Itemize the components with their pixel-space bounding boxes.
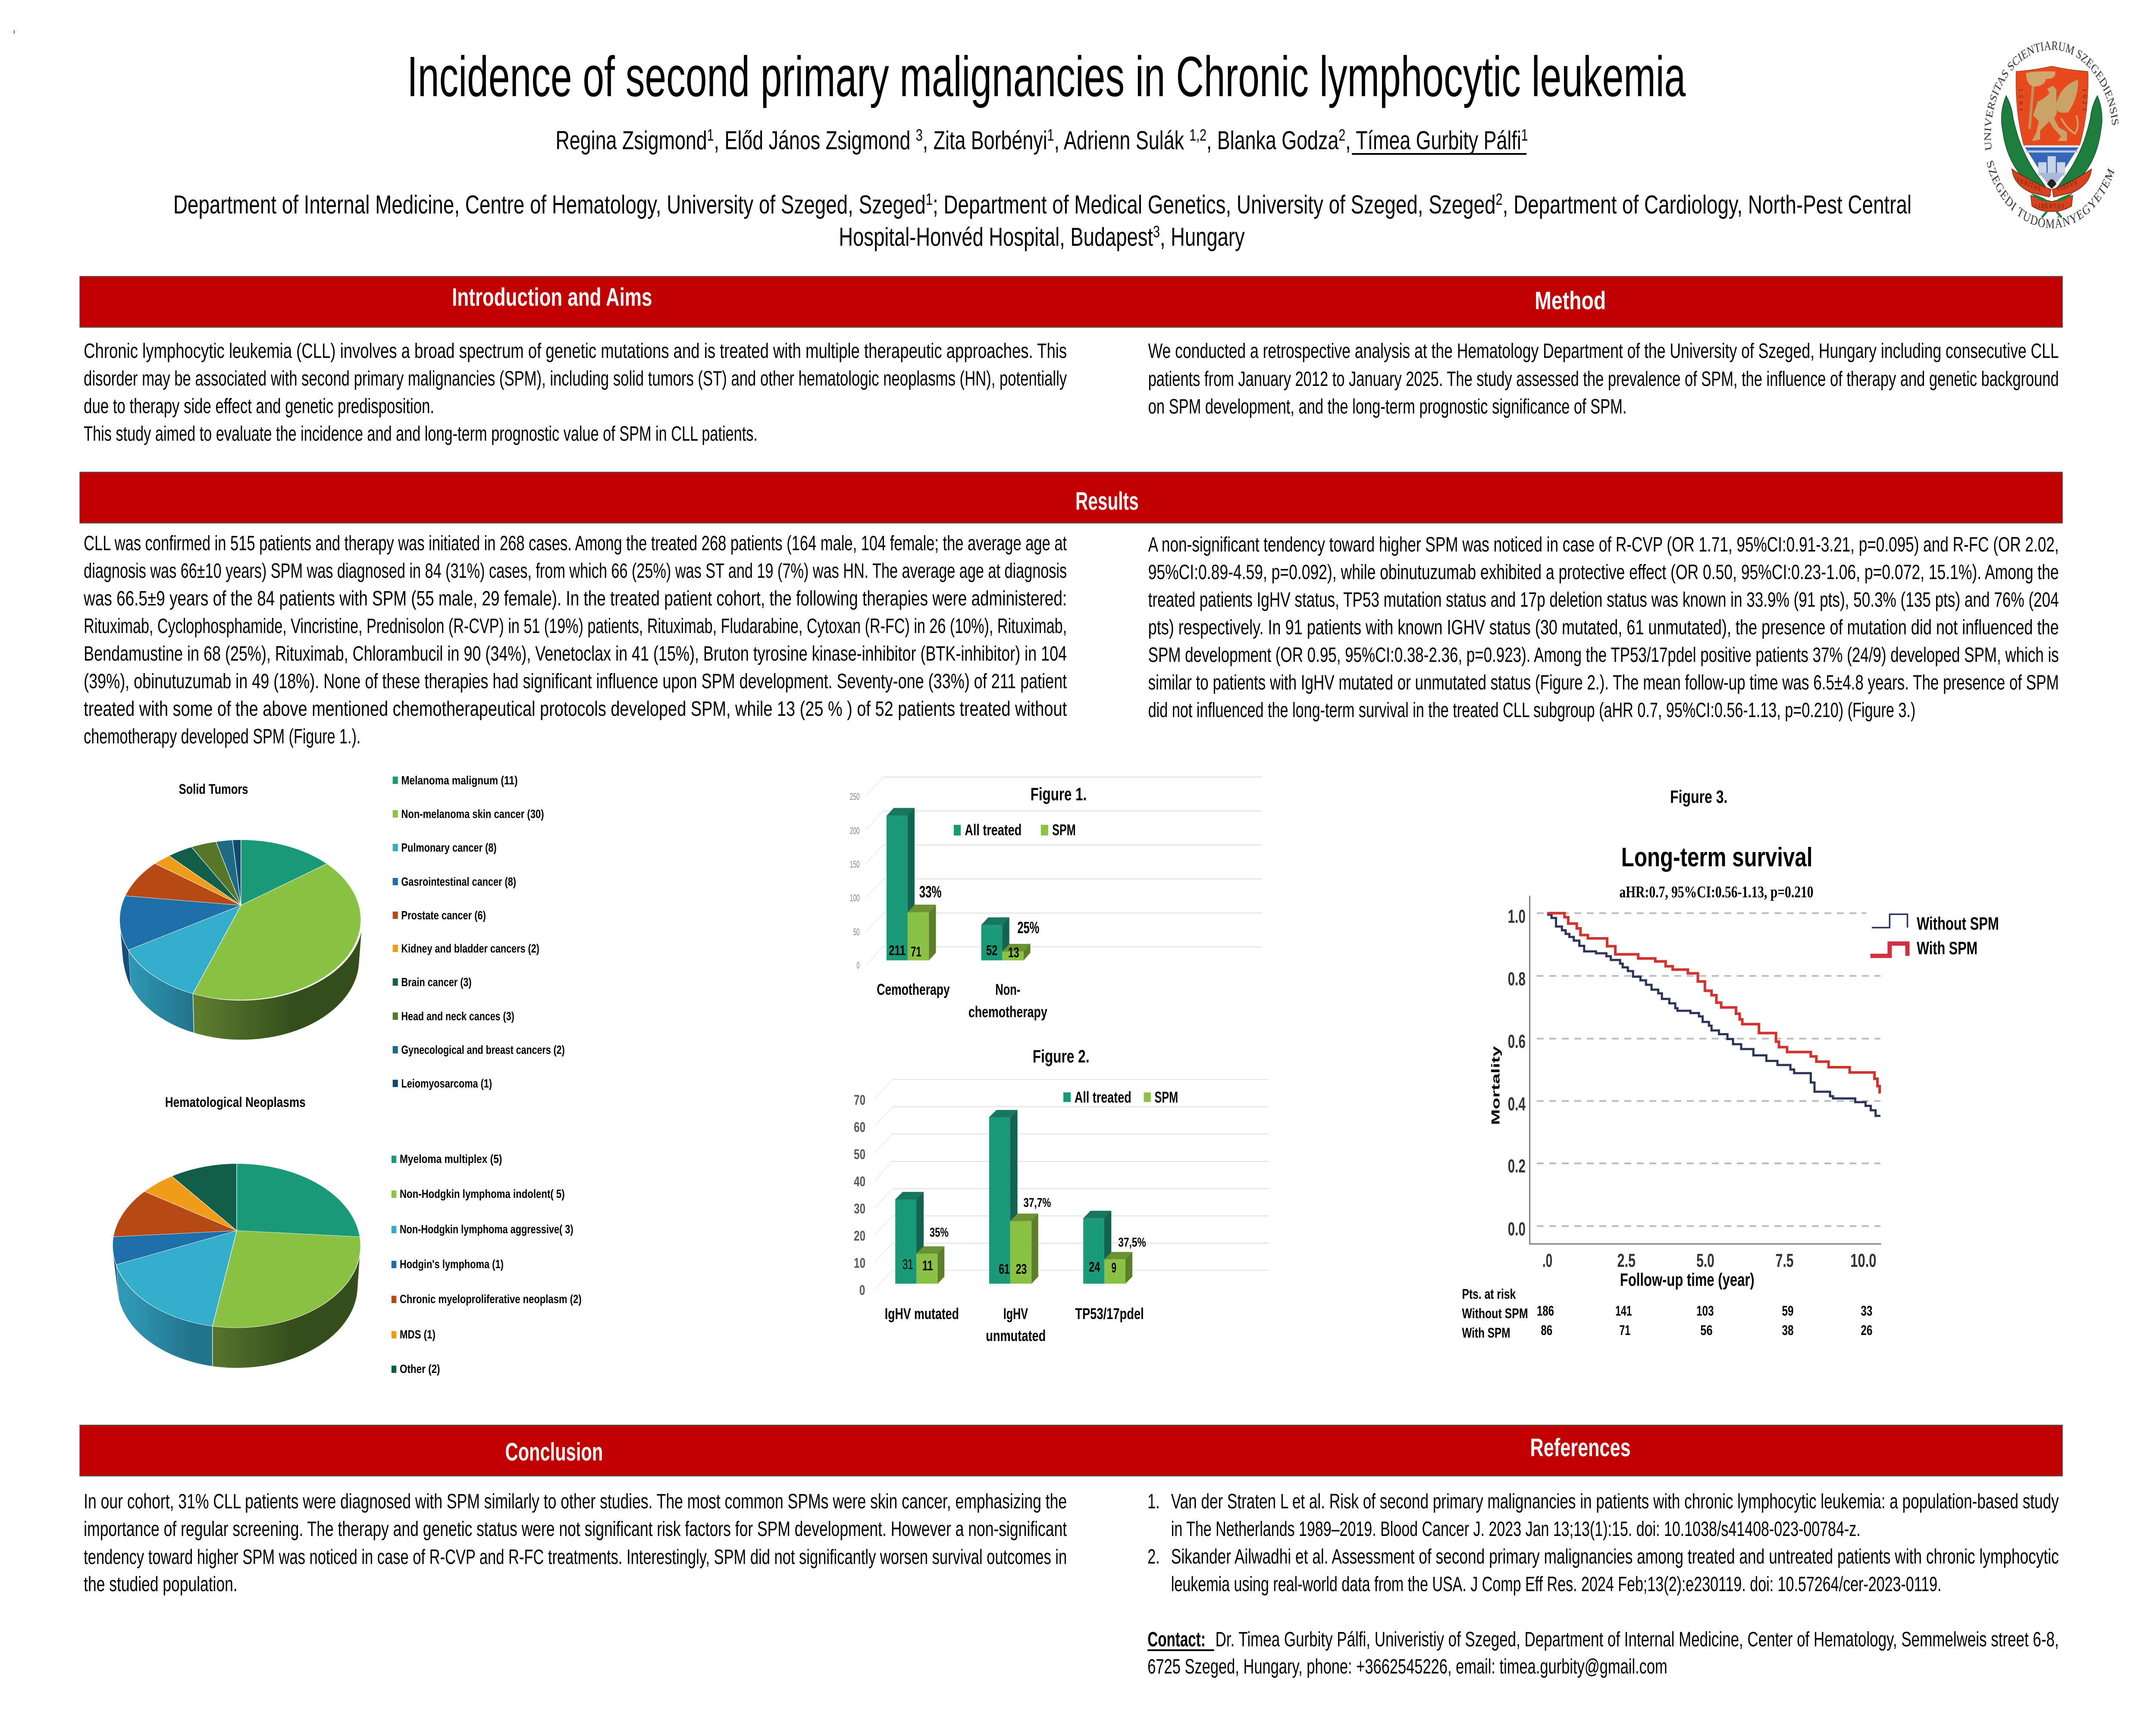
patients at risk table: 26 xyxy=(1861,1322,1872,1338)
figure 1 legend and labels: SPM xyxy=(1052,821,1076,839)
panel: Conclusion and References header bar: References xyxy=(1530,1434,1631,1462)
figure 2 legend and labels: SPM xyxy=(1155,1089,1178,1106)
3D pie slices: hematological neoplasms xyxy=(113,1163,360,1368)
figure 2 axis ticks: 50 xyxy=(854,1147,865,1162)
panel: Conclusion and References header bar: Conclusion xyxy=(505,1438,603,1466)
authors: , Előd János Zsigmond xyxy=(714,126,916,155)
chart title: Solid Tumors: Solid Tumors xyxy=(179,781,248,797)
patients at risk table: 33 xyxy=(1861,1303,1872,1319)
survival chart: Figure 3 xyxy=(1462,787,1999,1341)
figure 1 legend and labels: chemotherapy xyxy=(968,1003,1047,1021)
figure 1 axis ticks: 150 xyxy=(850,860,860,870)
patients at risk table: With SPM xyxy=(1462,1325,1510,1341)
text block: results right: SPM development (OR 0.95, 95%CI:0.38-2.36, p=0.923). Among the TP53/17pdel positive patients 37% (24/9) developed SPM, which is xyxy=(1148,643,2059,666)
figure 2 axis ticks: 10 xyxy=(854,1255,865,1271)
y axis tick labels: 0.4 xyxy=(1508,1094,1526,1115)
text block: introduction and aims xyxy=(84,339,1067,445)
figure 2 legend and labels: 37,5% xyxy=(1118,1235,1146,1250)
legend: hematological neoplasms: Myeloma multiplex (5) xyxy=(400,1153,502,1166)
text block: introduction and aims: This study aimed to evaluate the incidence and and long-term prognostic value of SPM in CLL patients. xyxy=(84,422,758,445)
figure 1 axis ticks xyxy=(850,792,860,971)
figure 1 axis ticks: 50 xyxy=(853,928,860,938)
authors: , Zita Borbényi xyxy=(923,126,1047,155)
text block: results left: CLL was confirmed in 515 patients and therapy was initiated in 268 cases. Among the treated 268 patients (164 male, 104 female; the average age at xyxy=(84,531,1067,555)
survival legend: Without SPM xyxy=(1917,913,1999,934)
panel: Results header bar xyxy=(80,472,2062,523)
figure 2 legend and labels: 61 xyxy=(999,1261,1010,1277)
figure 1 legend and labels: Non- xyxy=(995,981,1020,998)
legend: hematological neoplasms: Non-Hodgkin lymphoma indolent( 5) xyxy=(400,1188,565,1201)
text block: method: patients from January 2012 to January 2025. The study assessed the prevalence of SPM, the influence of therapy and genetic background xyxy=(1148,367,2059,390)
text block: results left: Rituximab, Cyclophosphamide, Vincristine, Prednisolon (R-CVP) in 51 (19%) patients, Rituximab, Fludarabine, Cytoxan (R-FC) in 26 (10%), Rituximab, xyxy=(84,614,1067,637)
patients at risk table: 59 xyxy=(1782,1303,1793,1319)
text block: results left: treated with some of the above mentioned chemotherapeutical protocols developed SPM, while 13 (25 % ) of 52 patients treated without xyxy=(84,697,1067,720)
text block: contact: 6725 Szeged, Hungary, phone: +3662545226, email: timea.gurbity@gmail.com xyxy=(1147,1655,1667,1678)
figure 2 legend and labels: 11 xyxy=(922,1258,933,1273)
bar chart 2 grid and 3D bars xyxy=(875,1079,1269,1289)
legend: solid tumors: Kidney and bladder cancers (2) xyxy=(401,942,539,956)
text block: references: in The Netherlands 1989–2019. Blood Cancer J. 2023 Jan 13;13(1):15. doi: 10.1038/s41408-023-00784-z. xyxy=(1171,1517,1861,1540)
authors: , Blanka Godza xyxy=(1206,126,1338,155)
text block: method xyxy=(1148,339,2059,418)
patients at risk table: 38 xyxy=(1782,1322,1793,1338)
figure 2 legend and labels: 35% xyxy=(930,1225,949,1240)
figure 2 axis ticks xyxy=(854,1092,865,1298)
figure 2 legend and labels: 23 xyxy=(1016,1261,1027,1277)
legend: hematological neoplasms: Chronic myeloproliferative neoplasm (2) xyxy=(400,1293,582,1306)
legend: hematological neoplasms: MDS (1) xyxy=(400,1328,436,1341)
legend: hematological neoplasms: Other (2) xyxy=(400,1363,440,1376)
text block: introduction and aims: due to therapy side effect and genetic predisposition. xyxy=(84,394,434,417)
patients at risk table: 141 xyxy=(1615,1303,1632,1319)
affiliations: 3 xyxy=(1153,222,1160,241)
text block: references xyxy=(1147,1489,2059,1595)
legend: solid tumors xyxy=(393,774,565,1091)
pie chart: Hematological Neoplasms xyxy=(113,1094,360,1368)
authors: , Tímea Gurbity Pálfi xyxy=(1345,126,1521,155)
title: Incidence of second primary malignancies in Chronic lymphocytic leukemia xyxy=(407,45,1686,109)
x axis tick labels: .0 xyxy=(1542,1250,1552,1271)
figure 2 axis ticks: 60 xyxy=(854,1119,865,1135)
authors: 3 xyxy=(916,125,923,144)
figure 2 legend and labels: TP53/17pdel xyxy=(1075,1305,1144,1322)
affiliations: ; Department of Medical Genetics, University of Szeged, Szeged xyxy=(933,191,1496,219)
figure 1 axis ticks: 200 xyxy=(850,826,860,837)
text block: results left: Bendamustine in 68 (25%), Rituximab, Chlorambucil in 90 (34%), Venetoclax in 41 (15%), Bruton tyrosine kinase-inhibitor (BTK-inhibitor) in 104 xyxy=(84,642,1067,665)
legend: solid tumors: Leiomyosarcoma (1) xyxy=(401,1077,492,1091)
legend: solid tumors: Melanoma malignum (11) xyxy=(401,774,518,787)
y axis tick labels: 1.0 xyxy=(1508,906,1526,927)
chart title: Hematological Neoplasms: Hematological Neoplasms xyxy=(165,1094,306,1110)
figure 2 legend and labels: 31 xyxy=(903,1257,913,1272)
text block: contact xyxy=(1147,1627,2059,1678)
icon: University of Szeged crest logo: UNIVERSITAS SCIENTIARUM SZEGEDIENSIS xyxy=(1982,38,2121,151)
text block: results left: diagnosis was 66±10 years) SPM was diagnosed in 84 (31%) cases, from which 66 (25%) was ST and 19 (7%) was HN. The average age at diagnosis xyxy=(84,559,1067,582)
affiliations: 2 xyxy=(1496,190,1503,208)
y axis tick labels: 0.8 xyxy=(1508,968,1526,990)
patients at risk table: 86 xyxy=(1541,1322,1552,1338)
figure 1 axis ticks: 0 xyxy=(857,961,860,971)
figure 1 axis ticks: 100 xyxy=(850,893,860,904)
y axis tick labels: 0.0 xyxy=(1508,1219,1526,1240)
x axis title: Follow-up time (year) xyxy=(1620,1269,1755,1290)
figure 2 legend and labels: unmutated xyxy=(986,1327,1046,1344)
x axis tick labels: 2.5 xyxy=(1617,1250,1636,1271)
chart heading: Long-term survival: Long-term survival xyxy=(1621,843,1812,872)
figure 2 title: Figure 2. xyxy=(1033,1046,1090,1066)
text block: conclusion: importance of regular screening. The therapy and genetic status were not significant risk factors for SPM development. However a non-significant xyxy=(84,1517,1067,1540)
text block: results right: treated patients IgHV status, TP53 mutation status and 17p deletion status was known in 33.9% (91 pts), 50.3% (135 pts) and 76% (204 xyxy=(1148,588,2059,611)
authors: Regina Zsigmond xyxy=(555,126,699,155)
text block: results left xyxy=(83,531,1067,748)
icon: University of Szeged crest logo: VERITAS xyxy=(2015,175,2042,193)
authors: , Adrienn Sulák xyxy=(1054,126,1189,155)
y axis tick labels: 0.2 xyxy=(1508,1156,1526,1177)
affiliations: 1 xyxy=(926,190,933,208)
bar chart: Figure 1 xyxy=(850,777,1262,1021)
y axis tick labels: 0.6 xyxy=(1508,1031,1526,1052)
y axis title: Mortality: Mortality xyxy=(1489,1046,1502,1125)
panel: Introduction and Method header bar xyxy=(80,276,2062,327)
panel: Conclusion and References header bar xyxy=(80,1425,2062,1476)
legend: solid tumors: Prostate cancer (6) xyxy=(401,909,486,922)
survival legend: With SPM xyxy=(1917,938,1977,958)
text block: references: 2. xyxy=(1147,1545,1160,1568)
figure 3 title: Figure 3. xyxy=(1670,787,1727,807)
authors xyxy=(555,125,1528,155)
icon: University of Szeged crest logo: VIRTUS xyxy=(2056,179,2078,194)
authors: 1,2 xyxy=(1189,125,1206,144)
icon: University of Szeged crest logo: LIBERTAS xyxy=(2034,203,2065,210)
text block: conclusion: In our cohort, 31% CLL patients were diagnosed with SPM similarly to other studies. The most common SPMs were skin cancer, emphasizing the xyxy=(84,1489,1067,1513)
x axis tick labels: 10.0 xyxy=(1850,1250,1877,1271)
text block: results left: (39%), obinutuzumab in 49 (18%). None of these therapies had significant influence upon SPM development. Seventy-one (33%) of 211 patient xyxy=(84,669,1067,693)
figure 2 legend and labels: 37,7% xyxy=(1023,1195,1051,1210)
legend: hematological neoplasms: Hodgin's lymphoma (1) xyxy=(400,1258,504,1271)
3D pie slices: solid tumors xyxy=(119,840,362,1040)
panel: Introduction and Method header bar: Method xyxy=(1535,287,1606,315)
authors: 2 xyxy=(1338,125,1345,144)
bar chart: Figure 2 xyxy=(854,1046,1269,1344)
patients at risk table: 56 xyxy=(1700,1322,1713,1338)
patients at risk table: 103 xyxy=(1696,1303,1714,1319)
text block: introduction and aims: Chronic lymphocytic leukemia (CLL) involves a broad spectrum of genetic mutations and is treated with multiple therapeutic approaches. This xyxy=(84,339,1067,362)
y axis tick labels xyxy=(1508,906,1526,1240)
figure 2 legend and labels: IgHV mutated xyxy=(885,1305,959,1322)
text block: conclusion xyxy=(84,1489,1067,1595)
legend: solid tumors: Brain cancer (3) xyxy=(401,976,472,989)
text block: introduction and aims: disorder may be associated with second primary malignancies (SPM), including solid tumors (ST) and other hematologic neoplasms (HN), potentially xyxy=(84,367,1067,390)
legend: hematological neoplasms: Non-Hodgkin lymphoma aggressive( 3) xyxy=(400,1223,573,1236)
text block: results right: pts) respectively. In 91 patients with known IGHV status (30 mutated, 61 unmutated), the presence of mutation did not influenced the xyxy=(1148,615,2059,639)
text block: results right xyxy=(1148,533,2059,721)
text block: results right: similar to patients with IgHV mutated or unmutated status (Figure 2.). The mean follow-up time was 6.5±4.8 years. The presence of SPM xyxy=(1148,671,2059,694)
panel: Introduction and Method header bar: Introduction and Aims xyxy=(452,283,652,311)
icon: University of Szeged crest logo: 1921 xyxy=(2081,88,2087,114)
figure 1 legend and labels: Cemotherapy xyxy=(877,981,950,998)
text block: method: We conducted a retrospective analysis at the Hematology Department of the University of Szeged, Hungary including consecutive CLL xyxy=(1148,339,2059,362)
legend: solid tumors: Gasrointestinal cancer (8) xyxy=(401,875,516,889)
figure 2 legend and labels xyxy=(885,1089,1178,1344)
text block: contact: Dr. Timea Gurbity Pálfi, Univeristiy of Szeged, Department of Internal Medicine, Center of Hematology, Semmelweis street 6-8, xyxy=(1216,1627,2059,1651)
text block: method: on SPM development, and the long-term prognostic significance of SPM. xyxy=(1148,395,1627,418)
text block: results right: A non-significant tendency toward higher SPM was noticed in case of R-CVP (OR 1.71, 95%CI:0.91-3.21, p=0.095) and R-FC (OR 2.02, xyxy=(1148,533,2059,556)
icon: University of Szeged crest logo: SZEGEDI TUDOMÁNYEGYETEM xyxy=(1984,158,2117,231)
affiliations: Hospital-Honvéd Hospital, Budapest xyxy=(839,223,1134,252)
patients at risk table xyxy=(1462,1286,1872,1341)
figure 1 legend and labels: 33% xyxy=(919,882,942,901)
figure 2 axis ticks: 30 xyxy=(854,1201,865,1216)
pie chart: Solid Tumors xyxy=(119,781,362,1040)
text block: results right: 95%CI:0.89-4.59, p=0.092), while obinutuzumab exhibited a protective effect (OR 0.50, 95%CI:0.23-1.06, p=0.072, 15.1%). Among the xyxy=(1148,560,2059,583)
authors: 1 xyxy=(707,125,714,144)
figure 1 legend and labels: 52 xyxy=(986,943,997,958)
figure 1 legend and labels: 25% xyxy=(1017,918,1039,937)
chart subtitle: hazard ratio: aHR:0.7, 95%CI:0.56-1.13, p=0.210 xyxy=(1619,884,1814,901)
legend: solid tumors: Non-melanoma skin cancer (30) xyxy=(401,808,544,821)
figure 1 legend and labels: All treated xyxy=(965,821,1022,839)
legend: solid tumors: Head and neck cances (3) xyxy=(401,1010,514,1023)
text block: contact: Contact: xyxy=(1147,1627,1206,1651)
figure 2 axis ticks: 40 xyxy=(854,1174,865,1189)
figure 2 legend and labels: IgHV xyxy=(1003,1305,1028,1322)
authors: 1 xyxy=(1521,125,1528,144)
text block: references: 1. xyxy=(1147,1489,1160,1513)
affiliations xyxy=(173,190,1912,252)
text block: references: Van der Straten L et al. Risk of second primary malignancies in patients with chronic lymphocytic leukemia: a population-based study xyxy=(1171,1489,2059,1513)
figure 2 legend and labels: All treated xyxy=(1075,1089,1131,1106)
x axis tick labels xyxy=(1542,1250,1877,1271)
text block: conclusion: tendency toward higher SPM was noticed in case of R-CVP and R-FC treatments. Interestingly, SPM did not significantly worsen survival outcomes in xyxy=(84,1545,1067,1568)
patients at risk table: Without SPM xyxy=(1462,1306,1528,1321)
Kaplan-Meier axes, grid and curves xyxy=(1530,896,1908,1244)
legend: solid tumors: Pulmonary cancer (8) xyxy=(401,841,497,855)
legend: solid tumors: Gynecological and breast cancers (2) xyxy=(401,1044,565,1057)
figure 1 legend and labels: 71 xyxy=(911,944,921,959)
affiliations: Department of Internal Medicine, Centre of Hematology, University of Szeged, Szeged xyxy=(173,191,872,219)
x axis tick labels: 7.5 xyxy=(1776,1250,1793,1271)
affiliations: , Hungary xyxy=(1160,223,1245,252)
text block: conclusion: the studied population. xyxy=(84,1572,238,1595)
figure 2 axis ticks: 20 xyxy=(854,1228,865,1244)
figure 1 legend and labels: 13 xyxy=(1008,945,1019,960)
figure 2 legend and labels: 9 xyxy=(1112,1260,1116,1275)
figure 1 axis ticks: 250 xyxy=(850,792,860,802)
patients at risk table: Pts. at risk xyxy=(1462,1286,1516,1302)
figure 1 legend and labels xyxy=(877,821,1076,1021)
figure 1 title: Figure 1. xyxy=(1031,784,1087,804)
figure 2 legend and labels: 24 xyxy=(1089,1259,1100,1275)
bar chart 1 grid and 3D bars xyxy=(865,777,1262,966)
figure 2 axis ticks: 0 xyxy=(859,1282,865,1298)
survival legend xyxy=(1917,913,1999,958)
text block: results left: chemotherapy developed SPM (Figure 1.). xyxy=(84,724,360,748)
text block: references: Sikander Ailwadhi et al. Assessment of second primary malignancies among treated and untreated patients with chronic lymphocytic xyxy=(1171,1545,2059,1568)
figure 1 legend and labels: 211 xyxy=(889,943,906,958)
panel: Results header bar: Results xyxy=(1075,487,1139,515)
patients at risk table: 186 xyxy=(1537,1303,1554,1319)
authors: 1 xyxy=(1047,125,1054,144)
icon: University of Szeged crest logo xyxy=(1982,38,2121,231)
legend: hematological neoplasms xyxy=(392,1153,582,1376)
affiliations: , Department of Cardiology, North-Pest Central xyxy=(1503,191,1912,219)
text block: results right: did not influenced the long-term survival in the treated CLL subgroup (aHR 0.7, 95%CI:0.56-1.13, p=0.210) (Figure 3.) xyxy=(1148,698,1915,721)
x axis tick labels: 5.0 xyxy=(1696,1250,1714,1271)
icon: University of Szeged crest logo: 1581 xyxy=(2018,88,2024,114)
text block: references: leukemia using real-world data from the USA. J Comp Eff Res. 2024 Feb;13(2):e230119. doi: 10.57264/cer-2023-0119. xyxy=(1171,1572,1941,1595)
patients at risk table: 71 xyxy=(1619,1322,1630,1338)
text block: results left: was 66.5±9 years of the 84 patients with SPM (55 male, 29 female). In the treated patient cohort, the following therapies were administered: xyxy=(83,586,1067,610)
figure 2 axis ticks: 70 xyxy=(854,1092,865,1108)
